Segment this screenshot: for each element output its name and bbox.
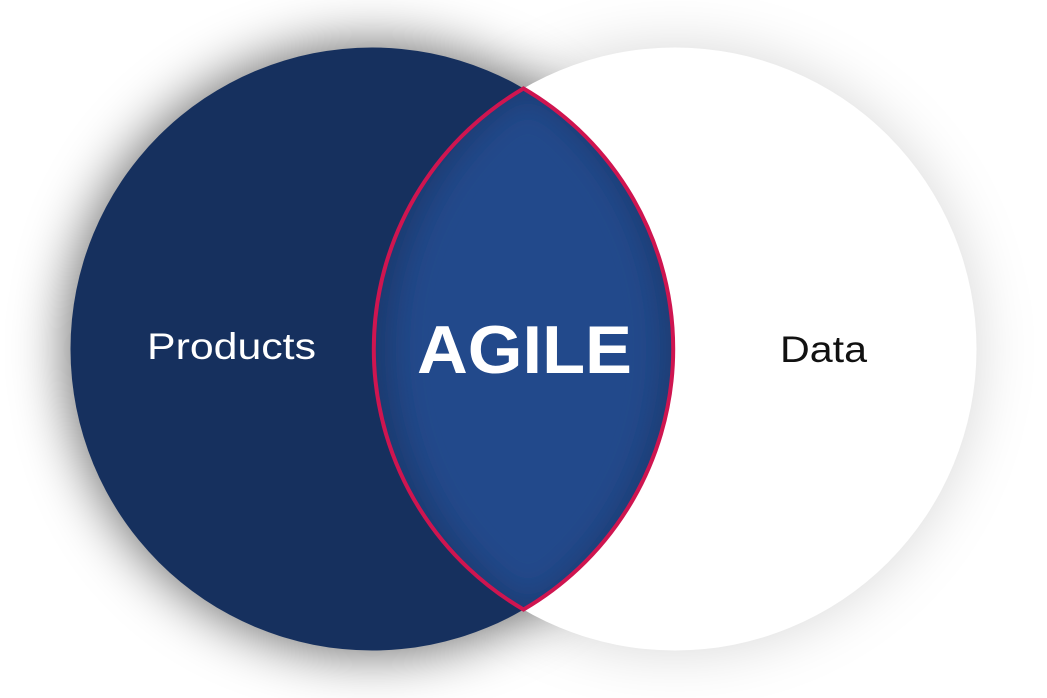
label: Products: Products (147, 326, 316, 367)
label: Data: Data (780, 329, 867, 370)
shadow: right circle (370, 44, 980, 654)
lens: AGILE overlap (372, 86, 676, 612)
circle: Data (374, 48, 976, 650)
circle: Products (70, 48, 674, 650)
shadow: left circle (67, 44, 677, 654)
label: AGILE: AGILE (417, 312, 632, 388)
